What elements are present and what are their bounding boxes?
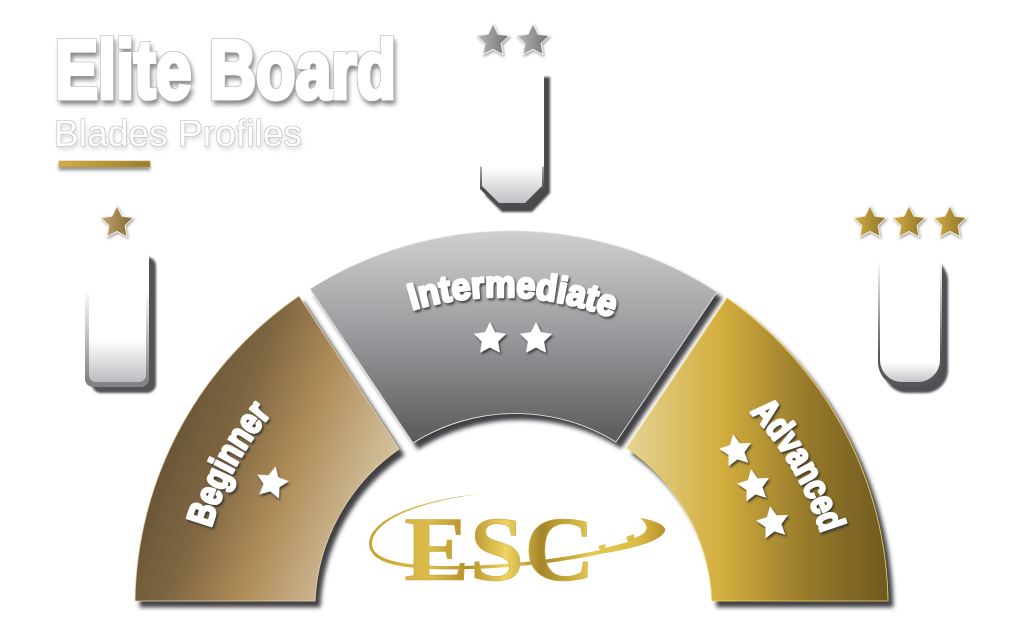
callout: beginner rating (85, 206, 156, 393)
logo swoosh (369, 494, 665, 569)
icon: bronze star (101, 206, 133, 237)
icon: three gold stars (854, 206, 966, 237)
callout: advanced rating (854, 206, 966, 393)
label: Beginner: Beginner (186, 400, 272, 530)
title underline bar (59, 161, 150, 167)
subtitle: Blades Profiles: Blades Profiles (54, 113, 302, 154)
panel: beginner segment (134, 296, 407, 611)
label: Advanced: Advanced (749, 400, 850, 536)
callout: intermediate rating (477, 24, 550, 212)
icon: white star (253, 463, 291, 500)
logo lettering: ESC (404, 498, 595, 600)
title: Elite Board: Elite Board (55, 23, 396, 116)
icon: two silver stars (477, 24, 549, 55)
bronze card body (85, 250, 156, 393)
label: Intermediate: Intermediate (406, 272, 620, 320)
icons: three white stars (717, 431, 791, 539)
logo: ESC (369, 494, 665, 600)
gold card body (878, 250, 948, 393)
silver card body (480, 70, 550, 212)
panel: intermediate segment (310, 230, 725, 452)
panel: advanced segment (626, 298, 897, 611)
icons: two white stars (474, 322, 552, 353)
